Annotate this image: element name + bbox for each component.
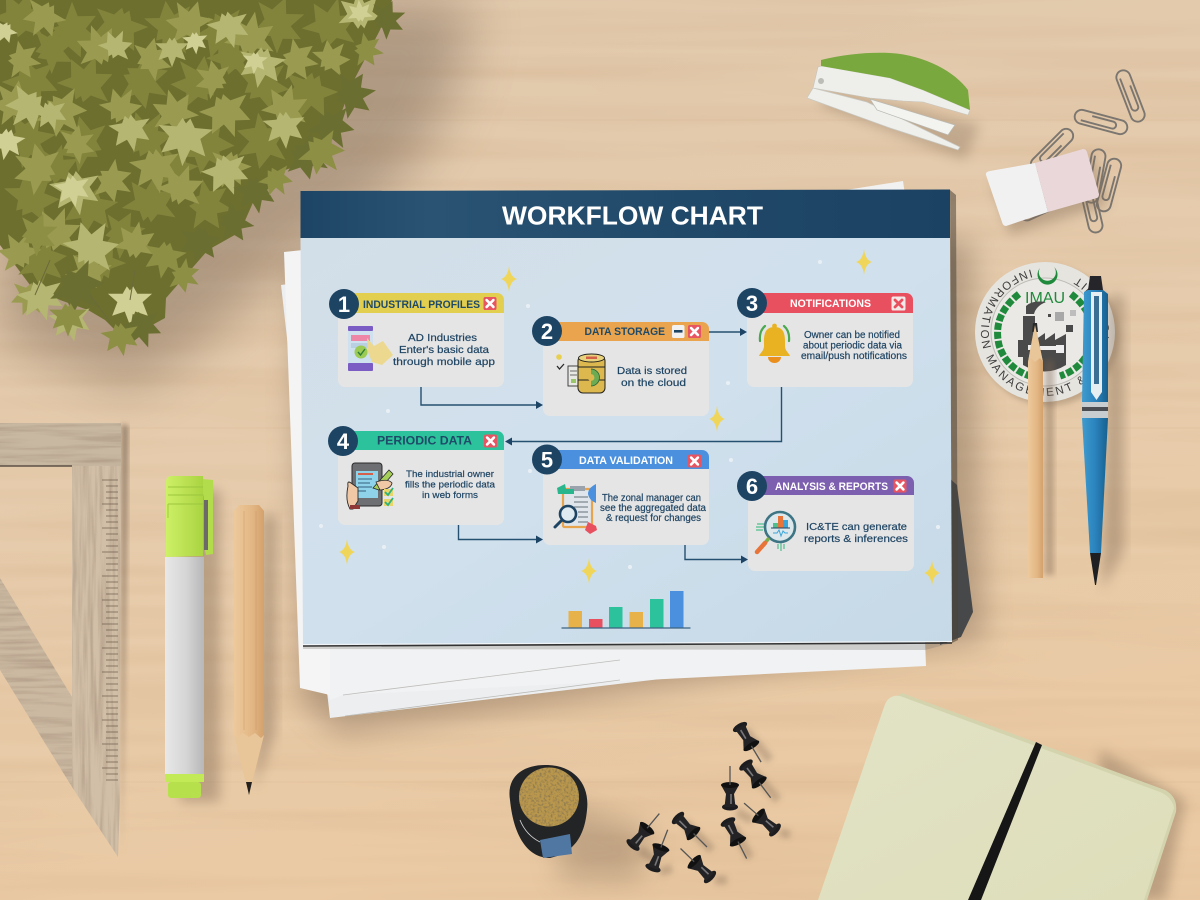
wooden pencil left (234, 505, 276, 795)
pen clip (1091, 292, 1102, 400)
white sheet 2 (300, 640, 926, 700)
card 3: notifications: about periodic data via (803, 340, 903, 352)
stapler upper arm (813, 66, 970, 115)
badge ring text: INFORMATION MANAGEMENT & ANALYSIS UNIT (980, 270, 1109, 396)
card 4: periodic data: PERIODIC DATA (377, 434, 472, 448)
card 6: analysis and reports: ANALYSIS & REPORTS (775, 481, 888, 493)
arrow: step 5 to 6 (685, 545, 748, 564)
plant foliage (0, 0, 412, 360)
stapler base arm (807, 88, 960, 150)
arrow: step 2 to 3 (709, 328, 747, 336)
shadow of plant (0, 0, 470, 390)
dark right sheets (940, 470, 973, 645)
card 2: data storage (532, 316, 709, 416)
stapler green top (821, 53, 970, 110)
badge crescent and star (1038, 267, 1058, 285)
factory emblem (1018, 302, 1076, 372)
number badge 4 (328, 426, 358, 456)
white sheet 3 (281, 282, 900, 718)
icon: database barrels (556, 354, 605, 393)
card 5: data validation: & request for changes (606, 513, 701, 524)
blue ballpoint pen (1082, 276, 1124, 590)
chart panel (300, 190, 958, 646)
card 1: industrial profiles: through mobile app (393, 356, 495, 368)
card 4: periodic data (328, 426, 504, 525)
card 1: industrial profiles: Enter's basic data (399, 344, 489, 356)
decorative stars (319, 249, 940, 586)
card 6: analysis and reports (737, 471, 914, 571)
card 1: industrial profiles (329, 289, 504, 387)
white sheet 1 (284, 250, 310, 688)
laurel wreath (998, 294, 1092, 376)
card 2: data storage: on the cloud (621, 377, 686, 389)
notebook (818, 693, 1185, 900)
number badge 5 (532, 444, 562, 474)
stapler (807, 53, 980, 160)
icon: phone with hand (348, 326, 393, 371)
highlighter marker (165, 476, 220, 802)
icon: tablet form (347, 463, 393, 509)
number badge 3 (737, 288, 767, 318)
card 1: industrial profiles: INDUSTRIAL PROFILES (363, 299, 480, 311)
card 3: notifications (737, 288, 913, 387)
card 4: periodic data: The industrial owner (406, 469, 495, 480)
push pins (624, 719, 790, 886)
pushpin holder (509, 765, 650, 880)
number badge 6 (737, 471, 767, 501)
card 5: data validation (532, 444, 709, 545)
card 5: data validation: The zonal manager can (602, 493, 701, 504)
card 6: analysis and reports: IC&TE can generate (806, 521, 907, 533)
stapler staple channel (870, 99, 955, 135)
card 3: notifications: Owner can be notified (804, 330, 900, 341)
number badge 2 (532, 316, 562, 346)
card 5: data validation: DATA VALIDATION (579, 455, 673, 467)
marker clip (202, 479, 213, 555)
number badge 1 (329, 289, 359, 319)
title bar (300, 190, 950, 238)
number badge 1: 1 (338, 292, 350, 317)
paper stack (281, 181, 985, 735)
card 6: analysis and reports: reports & inferences (804, 533, 908, 545)
icon: bell (759, 324, 790, 363)
card 2: data storage: DATA STORAGE (584, 326, 665, 338)
card 3: notifications: email/push notifications (801, 351, 907, 362)
card 3: notifications: NOTIFICATIONS (790, 298, 871, 310)
number badge 5: 5 (541, 448, 553, 472)
number badge 6: 6 (746, 474, 758, 499)
arrow: step 4 to 5 (458, 525, 543, 544)
sheet behind panel top (846, 181, 905, 195)
number badge 2: 2 (541, 319, 553, 344)
card 4: periodic data: fills the periodic data (405, 480, 496, 490)
card 1: industrial profiles: AD Industries (408, 332, 477, 344)
blue tag (540, 834, 572, 858)
number badge 3: 3 (746, 291, 758, 316)
minimise button (672, 325, 684, 338)
card 4: periodic data: in web forms (422, 490, 478, 501)
paper clips and eraser (986, 68, 1147, 234)
arrow: step 3 to 4 (505, 387, 782, 446)
icon: magnifier with chart (756, 512, 795, 552)
number badge 4: 4 (337, 429, 350, 454)
wooden pencil right (1028, 323, 1054, 578)
IMAU circular badge (975, 262, 1120, 408)
card 5: data validation: see the aggregated data (600, 503, 707, 514)
arrow: step 1 to 2 (421, 387, 543, 409)
ruler scale ticks (102, 480, 118, 780)
badge wordmark: IMAU (1025, 290, 1065, 307)
notebook elastic band (968, 742, 1042, 900)
card 2: data storage: Data is stored (617, 365, 687, 377)
icon: clipboard with magnifier (555, 484, 597, 534)
eraser (986, 149, 1108, 234)
wooden set square ruler (0, 423, 128, 857)
bar chart decoration (562, 591, 690, 628)
title: WORKFLOW CHART (502, 202, 763, 230)
